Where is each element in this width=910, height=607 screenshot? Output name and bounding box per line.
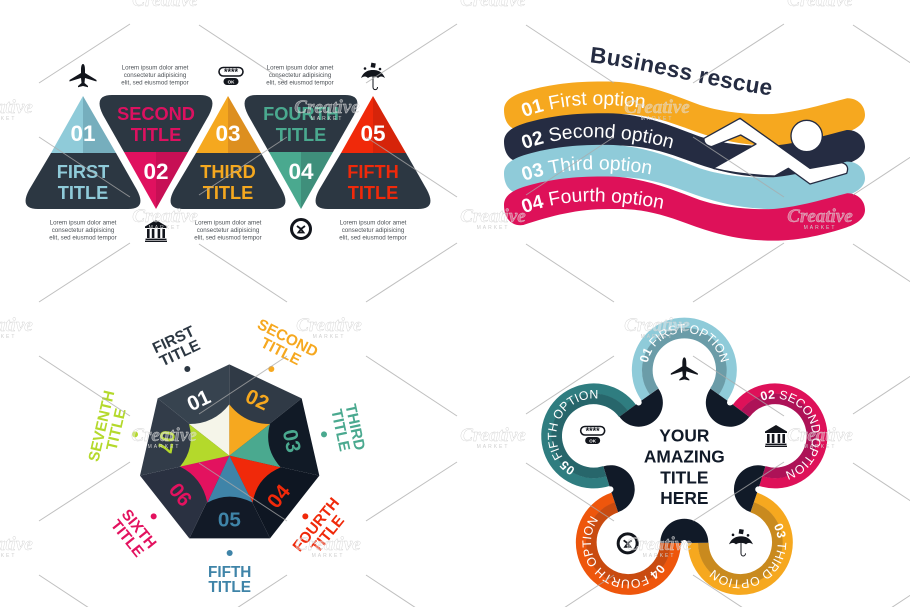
triangle 03: 03 <box>215 121 241 146</box>
triangle 05: TITLE <box>348 183 398 203</box>
triangle 05: FIFTH <box>347 162 399 182</box>
triangle 03 <box>171 96 285 209</box>
watermarks: MARKET <box>313 334 345 340</box>
number 06: 06 <box>164 479 196 511</box>
triangle 04: FOURTH <box>263 104 339 124</box>
watermarks: MARKET <box>149 225 181 231</box>
label: second title <box>248 316 321 374</box>
text block top 4: consectetur adipisicing <box>269 72 332 79</box>
petal 05 <box>541 383 636 488</box>
ribbon 01: 01 First option <box>522 92 644 116</box>
heading: business rescue: Business rescue <box>590 47 772 95</box>
triangle 05: 05 <box>360 121 386 146</box>
dark connectors <box>587 380 777 566</box>
text block bottom 3: consectetur adipisicing <box>197 227 260 234</box>
label: seventh title <box>86 389 133 467</box>
watermarks: Creative <box>295 534 361 555</box>
icon: plane <box>70 64 96 87</box>
label: fifth title: TITLE <box>208 579 251 596</box>
icon: bank <box>765 425 787 447</box>
text block top 2: Lorem ipsum dolor amet <box>122 64 189 72</box>
ribbon 04 <box>504 176 865 241</box>
watermarks: Creative <box>624 97 690 118</box>
ribbon 02: 02 Second option <box>522 124 673 148</box>
petal 04: 04 FOURTH OPTION <box>582 516 664 588</box>
label: first title <box>150 323 204 371</box>
center title: TITLE <box>660 467 708 487</box>
ribbon 02 <box>504 113 865 178</box>
center title: HERE <box>660 488 708 508</box>
label: third title <box>327 403 368 455</box>
triangle 02: 02 <box>143 159 169 184</box>
text block bottom 1: elit, sed eiusmod tempor <box>49 234 117 242</box>
text block top 4: elit, sed eiusmod tempor <box>266 80 334 86</box>
number 02: 02 <box>242 385 272 415</box>
watermarks: MARKET <box>311 116 343 122</box>
label: first title: FIRST <box>150 323 198 357</box>
triangle 01: 01 <box>70 121 96 146</box>
label: fourth title: TITLE <box>308 512 348 556</box>
center title: YOUR <box>659 426 710 446</box>
panel: heptagon diagram <box>86 316 368 596</box>
heptagon body <box>140 364 319 538</box>
panel: business rescue waves <box>504 47 865 241</box>
triangle 03: TITLE <box>203 183 253 203</box>
inner colored star <box>180 404 281 503</box>
watermarks: MARKET <box>477 225 509 231</box>
icon: password sign <box>581 426 605 444</box>
text block top 2: elit, sed eiusmod tempor <box>121 80 189 86</box>
triangle 04: TITLE <box>276 125 326 145</box>
watermarks: MARKET <box>804 444 836 450</box>
icon: swimmer <box>704 118 848 184</box>
watermarks: Creative <box>296 315 362 336</box>
icon: umbrella <box>729 529 753 556</box>
triangle 02: SECOND <box>117 104 195 124</box>
label: third title: THIRD <box>342 403 368 452</box>
watermarks: Creative <box>294 97 360 118</box>
watermarks: Creative <box>787 425 853 446</box>
icon: clock <box>618 534 637 553</box>
icon: umbrella <box>361 63 385 90</box>
triangle 01: TITLE <box>58 183 108 203</box>
label: third title: TITLE <box>327 408 353 453</box>
number 03: 03 <box>278 427 305 455</box>
panel: five petal ring <box>541 318 828 595</box>
text block bottom 3: elit, sed eiusmod tempor <box>194 234 262 242</box>
watermarks: Creative <box>787 206 853 227</box>
icon: password sign <box>219 67 243 85</box>
label: seventh title: TITLE <box>104 407 130 452</box>
petal 02 <box>733 383 828 488</box>
petal 04 <box>576 492 681 595</box>
watermarks: Creative <box>460 425 526 446</box>
watermarks: MARKET <box>148 444 180 450</box>
center title: AMAZING <box>644 446 725 466</box>
label: fourth title: FOURTH <box>290 495 343 555</box>
petal 02: 02 SECOND OPTION <box>760 390 820 480</box>
triangle 01 <box>26 96 140 209</box>
ribbon 03 <box>504 144 865 209</box>
number 07: 07 <box>152 428 179 455</box>
watermarks: MARKET <box>641 334 673 340</box>
text block bottom 3: Lorem ipsum dolor amet <box>195 220 262 226</box>
text block bottom 5: elit, sed eiusmod tempor <box>339 234 407 242</box>
petal 03: 03 THIRD OPTION <box>710 524 786 588</box>
watermarks: Creative <box>132 206 198 227</box>
triangle 05 <box>316 96 430 209</box>
text block bottom 5: Lorem ipsum dolor amet <box>340 220 407 226</box>
watermarks: MARKET <box>641 116 673 122</box>
ribbon 03: 03 Third option <box>522 155 652 180</box>
number 04: 04 <box>263 480 295 513</box>
ribbon 01 <box>504 82 865 146</box>
label: second title: SECOND <box>254 316 321 361</box>
petal 05: 05 FIFTH OPTION <box>548 390 598 474</box>
ribbon 04: 04 Fourth option <box>522 188 663 212</box>
triangle 02 <box>100 95 212 209</box>
triangle 03: THIRD <box>200 162 256 182</box>
watermarks: MARKET <box>312 553 344 559</box>
center title <box>644 426 725 508</box>
text block bottom 5: consectetur adipisicing <box>342 227 405 234</box>
watermarks: Creative <box>131 425 197 446</box>
dots <box>132 366 327 556</box>
text block top 4: Lorem ipsum dolor amet <box>267 64 334 72</box>
icon: bank <box>145 220 167 242</box>
label: second title: TITLE <box>258 335 304 369</box>
panel: triangle timeline <box>26 63 430 242</box>
watermarks: Creative <box>460 206 526 227</box>
watermarks: MARKET <box>477 444 509 450</box>
triangle 04 <box>245 95 357 209</box>
label: sixth title <box>106 506 159 562</box>
watermarks: MARKET <box>643 553 675 559</box>
label: seventh title: SEVENTH <box>86 389 118 463</box>
triangle 02: TITLE <box>131 125 181 145</box>
icon: plane <box>671 357 698 381</box>
triangle 01: FIRST <box>57 162 109 182</box>
label: sixth title: SIXTH <box>118 506 159 552</box>
watermarks: Creative <box>624 315 690 336</box>
label: sixth title: TITLE <box>107 517 147 561</box>
text block top 2: consectetur adipisicing <box>124 72 187 79</box>
number 05: 05 <box>218 509 241 532</box>
label: fifth title: FIFTH <box>208 564 251 581</box>
text block bottom 1: Lorem ipsum dolor amet <box>50 220 117 226</box>
label: first title: TITLE <box>157 337 203 370</box>
petal 01: 01 FIRST OPTION <box>640 324 729 362</box>
petal 01 <box>632 318 737 400</box>
number 01: 01 <box>184 385 214 416</box>
watermarks: MARKET <box>804 225 836 231</box>
watermarks: Creative <box>626 534 692 555</box>
triangle 04: 04 <box>288 159 314 184</box>
icon: clock <box>292 220 310 238</box>
text block bottom 1: consectetur adipisicing <box>52 227 115 234</box>
petal 03 <box>688 492 793 595</box>
label: fifth title <box>208 564 251 596</box>
